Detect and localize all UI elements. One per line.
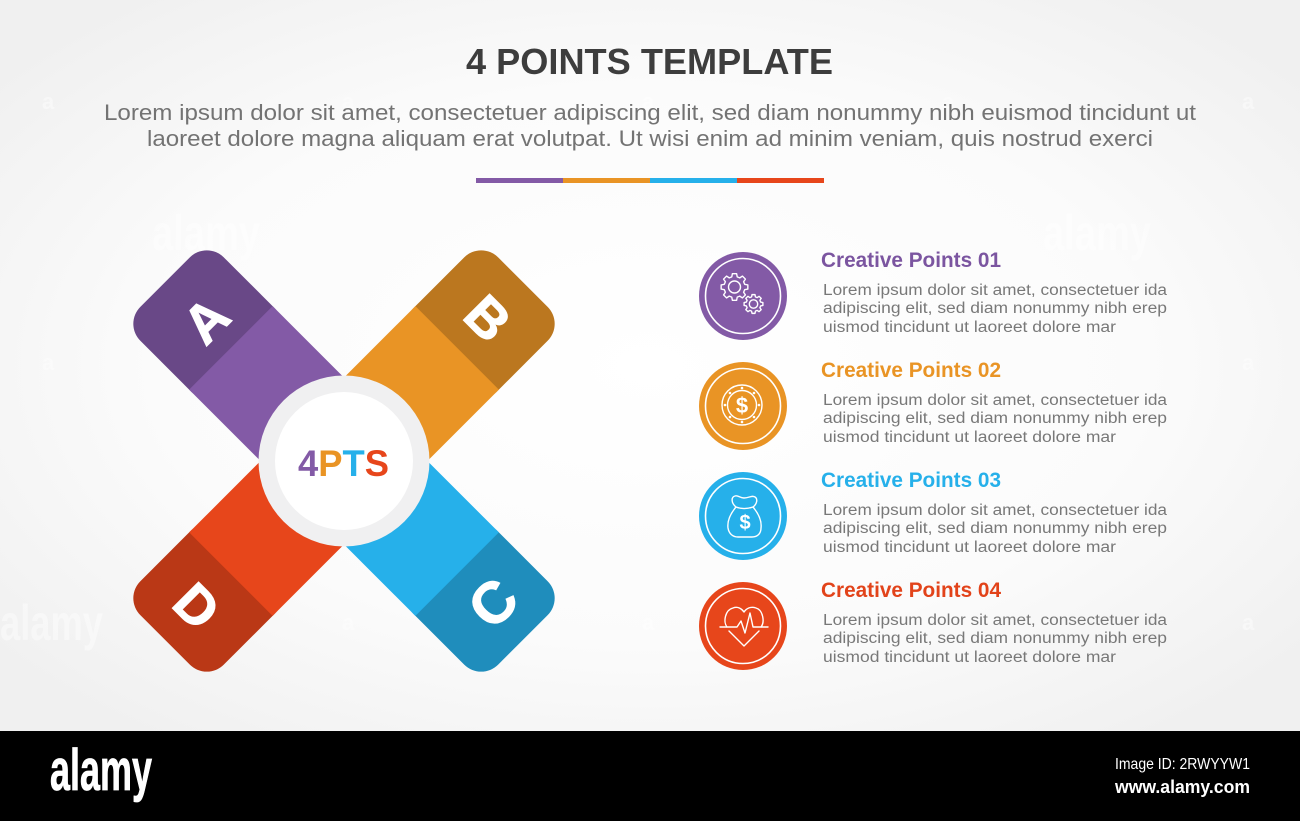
body 03: uismod tincidunt ut laoreet dolore mar — [823, 539, 1116, 556]
icon: money bag — [699, 472, 787, 560]
body 02: adipiscing elit, sed diam nonummy nibh erep — [823, 410, 1167, 427]
heading 02: Creative Points 02 — [821, 358, 1001, 382]
watermarks: a — [642, 610, 655, 635]
X diagram — [123, 240, 565, 682]
watermarks: a — [42, 89, 55, 114]
body 04: adipiscing elit, sed diam nonummy nibh erep — [823, 630, 1167, 647]
footer logo: alamy — [50, 738, 152, 803]
body 01: uismod tincidunt ut laoreet dolore mar — [823, 319, 1116, 336]
letter D: D — [161, 572, 231, 642]
watermarks: a — [1242, 610, 1255, 635]
watermarks: alamy — [152, 205, 260, 261]
arm D — [123, 419, 386, 682]
body 03: adipiscing elit, sed diam nonummy nibh erep — [823, 520, 1167, 537]
icon: money bag: $ — [739, 512, 751, 534]
watermarks: a — [42, 350, 55, 375]
icon: heart pulse — [699, 582, 787, 670]
website: www.alamy.com — [1114, 777, 1250, 797]
body 04: Lorem ipsum dolor sit amet, consectetuer ida — [823, 612, 1167, 629]
point 02 — [699, 358, 1167, 450]
heading 01: Creative Points 01 — [821, 248, 1001, 272]
arm C — [302, 419, 565, 682]
body 03: Lorem ipsum dolor sit amet, consectetuer ida — [823, 502, 1167, 519]
body 03 — [823, 502, 1167, 556]
point 01 — [699, 248, 1167, 340]
icon: coin — [699, 362, 787, 450]
body 01: Lorem ipsum dolor sit amet, consectetuer ida — [823, 282, 1167, 299]
arm B — [302, 240, 565, 503]
letter C: C — [456, 566, 531, 641]
watermarks — [0, 89, 1255, 651]
body 02: Lorem ipsum dolor sit amet, consectetuer ida — [823, 392, 1167, 409]
body 01 — [823, 282, 1167, 336]
subtitle text — [104, 100, 1196, 151]
image id: Image ID: 2RWYYW1 — [1115, 756, 1250, 773]
body 02: uismod tincidunt ut laoreet dolore mar — [823, 429, 1116, 446]
subtitle text: Lorem ipsum dolor sit amet, consectetuer adipiscing elit, sed diam nonummy nibh euismod tincidunt ut — [104, 100, 1196, 125]
arm A — [123, 240, 386, 503]
centre circle — [258, 376, 430, 546]
watermarks: a — [1242, 89, 1255, 114]
heading 04: Creative Points 04 — [821, 578, 1001, 602]
centre label: 4PTS — [298, 443, 389, 484]
body 04 — [823, 612, 1167, 666]
heading 03: Creative Points 03 — [821, 468, 1001, 492]
watermarks: alamy — [1043, 205, 1151, 261]
icon: coin: $ — [736, 393, 748, 418]
colour divider bar — [476, 178, 824, 183]
letter B: B — [452, 284, 522, 354]
letter A: A — [172, 286, 242, 356]
point 03 — [699, 468, 1167, 560]
title: 4 POINTS TEMPLATE — [466, 41, 833, 82]
watermarks: a — [342, 89, 355, 114]
watermarks: alamy — [0, 595, 103, 651]
body 04: uismod tincidunt ut laoreet dolore mar — [823, 649, 1116, 666]
subtitle text: laoreet dolore magna aliquam erat volutpat. Ut wisi enim ad minim veniam, quis nostrud exerci — [147, 126, 1153, 151]
watermarks: a — [642, 89, 655, 114]
footer bar — [0, 731, 1300, 821]
point 04 — [699, 578, 1167, 670]
body 01: adipiscing elit, sed diam nonummy nibh erep — [823, 300, 1167, 317]
watermarks: a — [342, 610, 355, 635]
watermarks: a — [942, 89, 955, 114]
watermarks: a — [1242, 350, 1255, 375]
icon: gears — [699, 252, 787, 340]
body 02 — [823, 392, 1167, 446]
